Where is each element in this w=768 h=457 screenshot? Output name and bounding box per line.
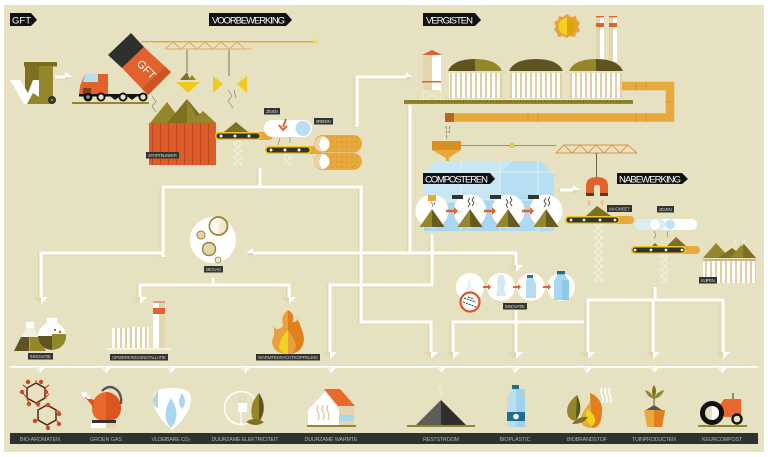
output icon: biobrandstof — [567, 388, 611, 428]
conveyor and breaker: BREKEN — [316, 119, 331, 124]
biogas bubbles — [190, 217, 236, 272]
conveyor with magnet label — [565, 205, 634, 282]
output icon: bio-aromaten — [20, 380, 61, 430]
section label: VOORBEWERKING: VOORBEWERKING — [212, 16, 285, 26]
kuipen storage: KUIPEN — [701, 278, 715, 283]
icon: chimneys — [596, 16, 617, 62]
section label: GFT: GFT — [12, 16, 31, 26]
zeven and second conveyor — [631, 206, 700, 283]
section label: GFT — [10, 13, 37, 26]
innovatie bottle sequence: INNOVATIE — [505, 304, 525, 309]
output label bar: DUURZAME ELEKTRICITEIT — [212, 437, 279, 443]
conveyor with magnet label: MAGNEET — [609, 206, 630, 212]
output label bar: RESTSTROOM — [423, 437, 460, 443]
output label bar — [10, 433, 758, 444]
output label bar: DUURZAME WARMTE — [304, 437, 358, 443]
section label: VERGISTEN — [423, 13, 481, 26]
output icon: duurzame elektriciteit — [224, 392, 264, 426]
baseline with output markers — [10, 366, 758, 373]
icon: truck with tipping GFT container — [72, 33, 171, 104]
icon: truck with tipping GFT container: GFT — [134, 58, 158, 82]
output label bar: BIO-AROMATEN — [20, 437, 60, 443]
output icon: bioplastic bottle — [507, 385, 525, 427]
compost circles — [416, 194, 562, 228]
innovatie flasks: INNOVATIE — [30, 354, 51, 359]
output icon: reststroom heap — [407, 384, 475, 427]
conveyor and breaker — [215, 108, 362, 170]
opwerkingsinstallatie: OPWERKINGSINSTALLATIE — [112, 355, 166, 360]
output icon: groen gas kettle — [81, 387, 121, 428]
innovatie bottle sequence — [456, 271, 575, 312]
output icon: tuinproducten plant — [644, 385, 665, 427]
output label bar: GROEN GAS — [90, 437, 122, 443]
icon: sun — [554, 14, 580, 38]
output icon: duurzame warmte house — [307, 389, 356, 427]
hopper and crane — [432, 141, 637, 179]
opwerkingsinstallatie — [107, 301, 171, 360]
flow lines — [34, 72, 730, 359]
biogas bubbles: BIOGAS — [206, 267, 221, 272]
icon: magnet — [586, 177, 608, 206]
digester tanks — [404, 59, 633, 104]
output icon: vloeibare CO2 drops — [153, 388, 191, 430]
section label: NABEWERKING: NABEWERKING — [619, 174, 681, 186]
output label bar: TUINPRODUCTEN — [632, 437, 676, 443]
orange pipe — [445, 82, 674, 140]
output label bar: BIOBRANDSTOF — [567, 437, 608, 443]
section label: VERGISTEN: VERGISTEN — [426, 16, 473, 26]
crane — [141, 40, 318, 112]
innovatie flasks — [14, 318, 66, 360]
flame: warmtekrachtkoppeling: WARMTEKRACHTKOPPELING — [258, 355, 318, 360]
stortbunker — [146, 99, 216, 165]
flame: warmtekrachtkoppeling — [256, 310, 320, 360]
output label bar: KEURCOMPOST — [702, 437, 743, 443]
zeven and second conveyor: ZEVEN — [659, 207, 672, 212]
kuipen storage — [699, 239, 756, 284]
conveyor and breaker: ZEVEN — [266, 109, 278, 114]
silo — [422, 50, 442, 100]
icon: green bin — [10, 62, 57, 104]
stortbunker: STORTBUNKER — [148, 153, 178, 158]
section label: COMPOSTEREN: COMPOSTEREN — [425, 174, 488, 186]
greenhouse — [424, 161, 554, 231]
output icon: keurcompost tractor — [698, 393, 747, 427]
output label bar: BIOPLASTIC — [500, 437, 531, 443]
output label bar: VLOEIBARE CO₂ — [152, 437, 190, 443]
